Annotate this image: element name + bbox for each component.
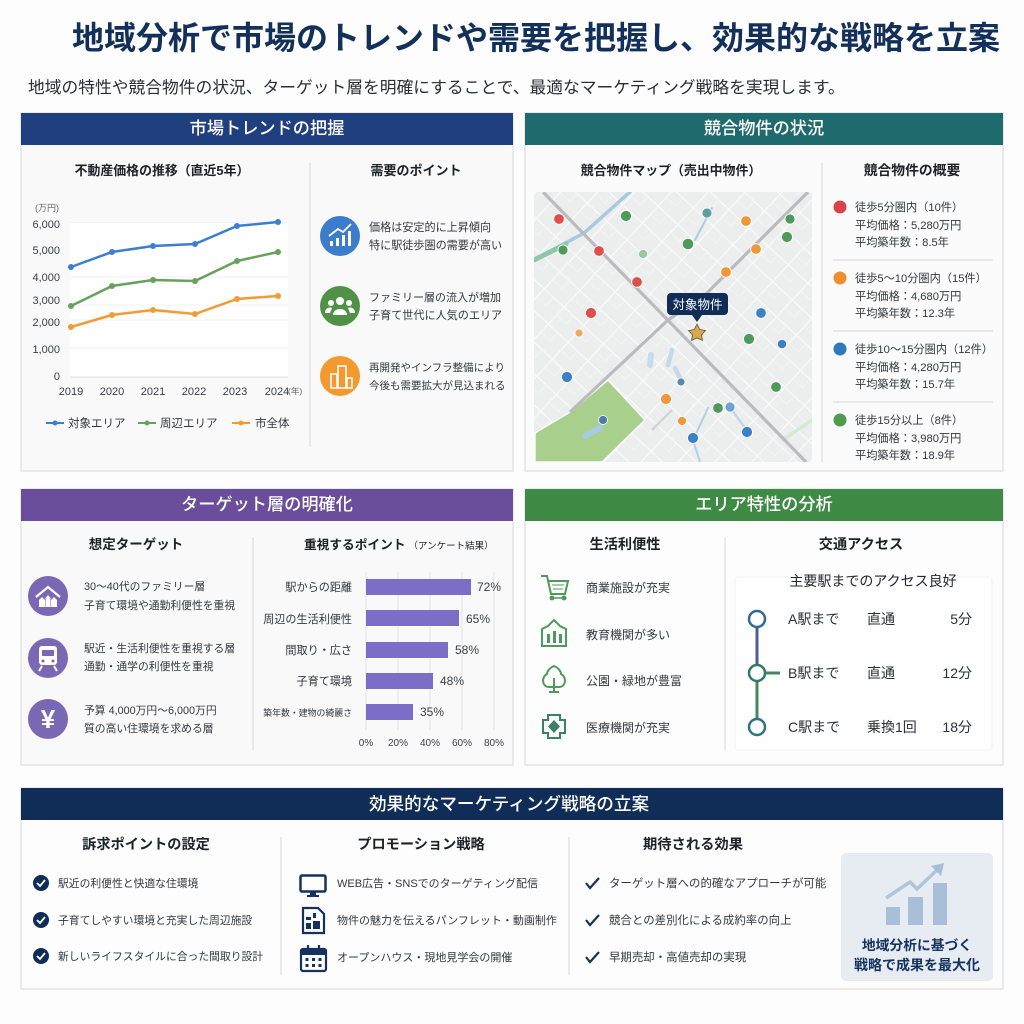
overview: within 5 minutes: 平均築年数：8.5年 [855, 235, 949, 249]
callout: maximize results [841, 853, 993, 981]
convenience: medical: 医療機関が充実 [586, 720, 670, 735]
demand point 1: 価格は安定的に上昇傾向 [369, 220, 491, 234]
header: target audience [21, 489, 513, 521]
card: station access [735, 573, 992, 750]
card: station access: B駅まで [788, 665, 839, 681]
card: station access: C駅まで [788, 719, 840, 735]
overview: 5 to 10 minutes [834, 271, 987, 320]
panel: area characteristics [525, 489, 1003, 765]
chart legend: 対象エリア [68, 417, 126, 430]
target 1: family: 30～40代のファミリー層 [84, 580, 205, 593]
heading: priority points: 重視するポイント （アンケート結果） [304, 537, 494, 552]
heading: assumed target: 想定ターゲット [89, 536, 183, 552]
bar chart: survey results: 35% [420, 705, 444, 719]
overview: 5 to 10 minutes: 徒歩5～10分圏内（15件） [855, 271, 987, 285]
convenience: parks [543, 666, 682, 692]
panel: marketing strategy [21, 788, 1003, 989]
convenience: education [542, 620, 670, 646]
route line [749, 611, 780, 735]
demand point 2: ファミリー層の流入が増加 [369, 290, 501, 304]
heading: price chart: 不動産価格の推移（直近5年） [75, 163, 249, 178]
bar chart: survey results: 周辺の生活利便性 [263, 612, 352, 626]
heading: transport access: 交通アクセス [819, 537, 903, 553]
target 2: train: 駅近・生活利便性を重視する層 [84, 641, 235, 655]
callout: maximize results: 戦略で成果を最大化 [854, 957, 980, 973]
bar chart: survey results: 築年数・建物の綺麗さ [263, 707, 352, 718]
callout: target property: 対象物件 [672, 298, 723, 312]
demand point 1 [320, 216, 502, 256]
card: station access: 5分 [950, 611, 972, 627]
bar chart: survey results: 40% [420, 738, 440, 749]
overview: within 5 minutes [834, 200, 963, 249]
target 1: family [28, 576, 235, 616]
heading: map: 競合物件マップ（売出中物件） [581, 163, 761, 178]
header: market trends [21, 113, 513, 145]
target 1: family: 子育て環境や通勤利便性を重視 [84, 598, 235, 612]
convenience: medical [543, 715, 670, 738]
chart legend [46, 416, 290, 430]
line chart: real estate prices: 2019 [59, 386, 83, 398]
overview: 5 to 10 minutes: 平均価格：4,680万円 [855, 289, 961, 303]
target 3: budget: 質の高い住環境を求める層 [84, 721, 214, 735]
demand point 3 [320, 356, 506, 396]
chart legend: 周辺エリア [160, 417, 218, 430]
promotion: web ads: WEB広告・SNSでのターゲティング配信 [337, 876, 538, 890]
line chart: real estate prices [32, 203, 302, 398]
header: competing properties [525, 113, 1003, 145]
line chart: real estate prices: 2023 [223, 386, 247, 398]
card: station access: 直通 [867, 611, 895, 627]
target 3: budget [28, 699, 217, 739]
line chart: real estate prices: (年) [288, 386, 302, 396]
series: whole city [68, 293, 281, 330]
overview: within 5 minutes: 平均価格：5,280万円 [855, 218, 961, 232]
line chart: real estate prices: 0 [54, 371, 60, 383]
appeal points list: 子育てしやすい環境と充実した周辺施設 [58, 914, 252, 927]
header: market trends: 市場トレンドの把握 [190, 118, 344, 138]
overview: 10 to 15 minutes: 平均価格：4,280万円 [855, 360, 961, 374]
competitor pins [554, 208, 795, 444]
convenience: education: 教育機関が多い [586, 627, 670, 642]
bar chart: survey results: 駅からの距離 [285, 580, 352, 594]
line chart: real estate prices: 2022 [182, 386, 206, 398]
overview: 5 to 10 minutes: 平均築年数：12.3年 [855, 306, 955, 320]
demand point 3: 今後も需要拡大が見込まれる [369, 379, 506, 392]
demand point 2: 子育て世代に人気のエリア [369, 308, 502, 322]
bar chart: survey results: 60% [452, 738, 472, 749]
card: station access: 直通 [867, 665, 895, 681]
card: station access: A駅まで [788, 611, 839, 627]
overview: 10 to 15 minutes: 徒歩10～15分圏内（12件） [855, 342, 993, 356]
card: station access: 12分 [942, 665, 972, 681]
bar chart: survey results: 間取り・広さ [285, 644, 352, 657]
heading: overview: 競合物件の概要 [864, 162, 960, 178]
header: competing properties: 競合物件の状況 [704, 118, 824, 138]
convenience: shops [541, 576, 670, 600]
series: target area [68, 219, 281, 270]
target 2: train [28, 638, 235, 678]
expected effects list: 競合との差別化による成約率の向上 [609, 913, 792, 927]
panel: target audience [21, 489, 513, 765]
line chart: real estate prices: 2024 [265, 386, 289, 398]
line chart: real estate prices: 3,000 [32, 295, 60, 307]
demand point 3: 再開発やインフラ整備により [369, 361, 505, 374]
promotion: open house: オープンハウス・現地見学会の開催 [337, 950, 512, 964]
icon: rising chart [886, 863, 947, 925]
header: marketing strategy: 効果的なマーケティング戦略の立案 [369, 794, 649, 814]
header: area characteristics [525, 489, 1003, 521]
line chart: real estate prices: (万円) [35, 203, 59, 213]
heading: promotion: プロモーション戦略 [357, 836, 486, 853]
bar chart: survey results: 80% [484, 738, 504, 749]
target 3: budget: ¥ [41, 704, 56, 734]
overview: over 15 minutes: 平均築年数：18.9年 [855, 448, 955, 462]
line chart: real estate prices: 2020 [100, 386, 124, 398]
promotion: pamphlet [303, 908, 557, 933]
overview: over 15 minutes [834, 413, 963, 462]
header: target audience: ターゲット層の明確化 [181, 494, 353, 514]
overview: 10 to 15 minutes: 平均築年数：15.7年 [855, 377, 955, 391]
header: marketing strategy [21, 788, 1003, 820]
bar chart: survey results: 20% [388, 738, 408, 749]
heading: expected effects: 期待される効果 [643, 836, 743, 853]
bar chart: survey results [263, 572, 504, 749]
line chart: real estate prices: 2,000 [32, 317, 60, 329]
bar chart: survey results: 子育て環境 [297, 675, 352, 688]
panel: competing properties [525, 113, 1003, 471]
overview: within 5 minutes: 徒歩5分圏内（10件） [855, 200, 963, 214]
line chart: real estate prices: 5,000 [32, 245, 60, 257]
demand point 2 [320, 286, 502, 326]
overview: over 15 minutes: 平均価格：3,980万円 [855, 431, 961, 445]
expected effects list: ターゲット層への的確なアプローチが可能 [609, 876, 827, 890]
convenience: shops: 商業施設が充実 [586, 580, 670, 595]
line chart: real estate prices: 4,000 [32, 272, 60, 284]
line chart: real estate prices: 6,000 [32, 219, 60, 231]
bar chart: survey results: 58% [455, 643, 479, 657]
bar chart: survey results: 0% [359, 738, 373, 749]
main roads [543, 192, 808, 462]
title: 地域分析で市場のトレンドや需要を把握し、効果的な戦略を立案 [72, 20, 1000, 56]
card: station access: 乗換1回 [867, 719, 917, 735]
expected effects list [586, 876, 827, 964]
target 2: train: 通勤・通学の利便性を重視 [84, 659, 214, 673]
water and greenery [534, 192, 812, 462]
overview: 10 to 15 minutes [834, 342, 993, 391]
promotion: web ads [300, 876, 538, 897]
convenience: parks: 公園・緑地が豊富 [586, 673, 682, 688]
card: station access: 18分 [942, 719, 972, 735]
heading: demand points: 需要のポイント [370, 163, 462, 178]
card: station access: 主要駅までのアクセス良好 [789, 573, 957, 589]
target star [688, 324, 706, 340]
appeal points list: 新しいライフスタイルに合った間取り設計 [58, 950, 263, 963]
park [535, 380, 645, 462]
chart legend: 市全体 [255, 416, 290, 430]
line chart: real estate prices: 2021 [141, 386, 165, 398]
appeal points list: 駅近の利便性と快適な住環境 [58, 876, 199, 890]
overview: over 15 minutes: 徒歩15分以上（8件） [855, 413, 963, 427]
promotion: open house [301, 945, 512, 971]
appeal points list [33, 875, 263, 964]
heading: appeal points: 訴求ポイントの設定 [82, 836, 210, 853]
callout: maximize results: 地域分析に基づく [862, 937, 972, 953]
target 3: budget: 予算 4,000万円～6,000万円 [84, 703, 217, 717]
bar chart: survey results: 65% [466, 612, 490, 626]
header: area characteristics: エリア特性の分析 [695, 494, 833, 514]
series: surrounding area [68, 249, 281, 309]
subtitle: 地域の特性や競合物件の状況、ターゲット層を明確にすることで、最適なマーケティング戦略を実現します。 [28, 78, 845, 97]
bar chart: survey results: 72% [477, 580, 501, 594]
promotion: pamphlet: 物件の魅力を伝えるパンフレット・動画制作 [337, 913, 557, 927]
expected effects list: 早期売却・高値売却の実現 [609, 951, 747, 964]
panel: market trends [21, 113, 513, 471]
demand point 1: 特に駅徒歩圏の需要が高い [369, 238, 502, 252]
heading: convenience: 生活利便性 [590, 536, 660, 553]
competitor map [534, 192, 812, 462]
line chart: real estate prices: 1,000 [32, 344, 60, 356]
bar chart: survey results: 48% [440, 674, 464, 688]
callout: target property [667, 293, 728, 322]
